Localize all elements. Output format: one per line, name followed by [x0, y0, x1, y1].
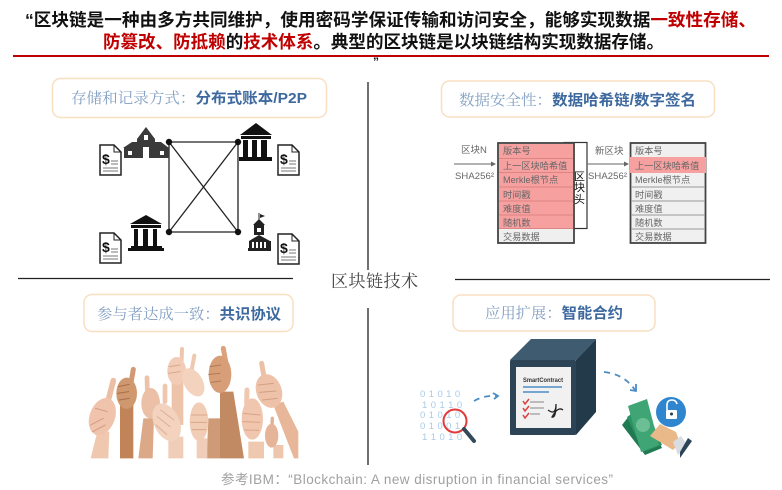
heading box: consensus protocol: 参与者达成一致：共识协议: [97, 305, 281, 323]
block diagram: new block: 上一区块哈希值: [635, 160, 699, 171]
icon: binary data with magnifier: [420, 389, 474, 443]
icon: school building: [123, 127, 169, 158]
block diagram: new block: Merkle根节点: [635, 174, 690, 185]
arrow: block N into block header: SHA256²: [455, 171, 494, 182]
block diagram: previous block: Merkle根节点: [503, 174, 558, 185]
heading: blockchain definition: [25, 10, 756, 69]
arrow: block N into block header: [454, 144, 496, 182]
block diagram: previous block: 交易数据: [503, 231, 540, 242]
heading box: hash chain and signature: [442, 81, 714, 117]
arrow: data to contract: [474, 393, 498, 401]
icon: ledger document top right: $: [280, 151, 288, 167]
block diagram: new block: [630, 143, 706, 243]
icon: ledger document bottom left: $: [102, 239, 110, 255]
block diagram: new block: 版本号: [635, 145, 663, 156]
icon: ledger document top left: $: [102, 151, 110, 167]
heading box: distributed ledger: [52, 78, 326, 118]
centre divider lines: [18, 82, 770, 465]
icon: smart contract cube: SmartContract: [523, 378, 563, 384]
centre label: 区块链技术: [331, 272, 418, 291]
arrow: contract to payment: [604, 372, 636, 391]
block diagram: previous block: 版本号: [503, 145, 531, 156]
block diagram: previous block: 区: [574, 171, 585, 183]
icon: ledger document bottom right: $: [280, 240, 288, 256]
icon: binary data with magnifier: 0 1 0 1 0: [420, 410, 461, 421]
block diagram: previous block: 难度值: [503, 203, 531, 214]
heading: blockchain definition: ”: [373, 55, 379, 69]
heading box: smart contract: 应用扩展：智能合约: [485, 304, 623, 322]
heading box: smart contract: [453, 295, 655, 331]
icon: smart contract cube: [510, 339, 596, 435]
panel: consensus: [84, 294, 298, 458]
block diagram: previous block: 上一区块哈希值: [503, 160, 567, 171]
arrow: new block: SHA256²: [588, 171, 627, 182]
block diagram: new block: 时间戳: [635, 189, 663, 200]
panel: application extension: [420, 295, 692, 458]
block diagram: new block: 交易数据: [635, 231, 672, 242]
icon: ledger document top left: [100, 145, 121, 175]
icon: binary data with magnifier: 0 1 0 1 0: [420, 389, 461, 400]
icon: cash in hand with open lock: [622, 397, 692, 458]
panel: storage and recording: [52, 78, 326, 264]
heading: blockchain definition: 防篡改、防抵赖的技术体系。典型的区块链是以块链结构实现数据存储。: [103, 32, 664, 52]
icon: binary data with magnifier: 1 1 0 1 0: [422, 432, 463, 443]
arrow: block N into block header: 区块N: [461, 144, 487, 156]
block diagram: previous block: 块: [574, 181, 585, 194]
icon: binary data with magnifier: 0 1 0 0 1: [420, 421, 461, 432]
arrow: new block: [587, 145, 629, 182]
icon: ledger document top right: [278, 145, 299, 175]
icon: ledger document bottom right: [278, 234, 299, 264]
icon: bank bottom left: [128, 215, 164, 251]
block diagram: previous block: 时间戳: [503, 189, 531, 200]
block diagram: previous block: 随机数: [503, 217, 531, 228]
block diagram: previous block: 头: [574, 193, 585, 206]
icon: bank top right: [239, 123, 272, 161]
icon: binary data with magnifier: 1 0 1 1 0: [422, 400, 463, 411]
block diagram: new block: 难度值: [635, 203, 663, 214]
heading: blockchain definition: “区块链是一种由多方共同维护，使用密码学保证传输和访问安全，能够实现数据一致性存储、: [25, 10, 756, 30]
heading box: hash chain and signature: 数据安全性：数据哈希链/数字签名: [459, 91, 696, 109]
block diagram: new block: 随机数: [635, 217, 663, 228]
illustration: raised thumbs up hands: [84, 348, 298, 458]
footer: source citation: 参考IBM：“Blockchain: A new disruption in financial services”: [221, 471, 613, 487]
heading box: distributed ledger: 存储和记录方式： 分布式账本/P2P: [71, 89, 307, 107]
icon: ledger document bottom left: [100, 233, 121, 263]
icon: town hall: [248, 213, 271, 251]
arrow: new block: 新区块: [595, 145, 624, 157]
panel: data security: [442, 81, 714, 243]
network graph: [166, 139, 241, 235]
heading box: consensus protocol: [84, 294, 293, 332]
block diagram: previous block: [498, 142, 587, 243]
